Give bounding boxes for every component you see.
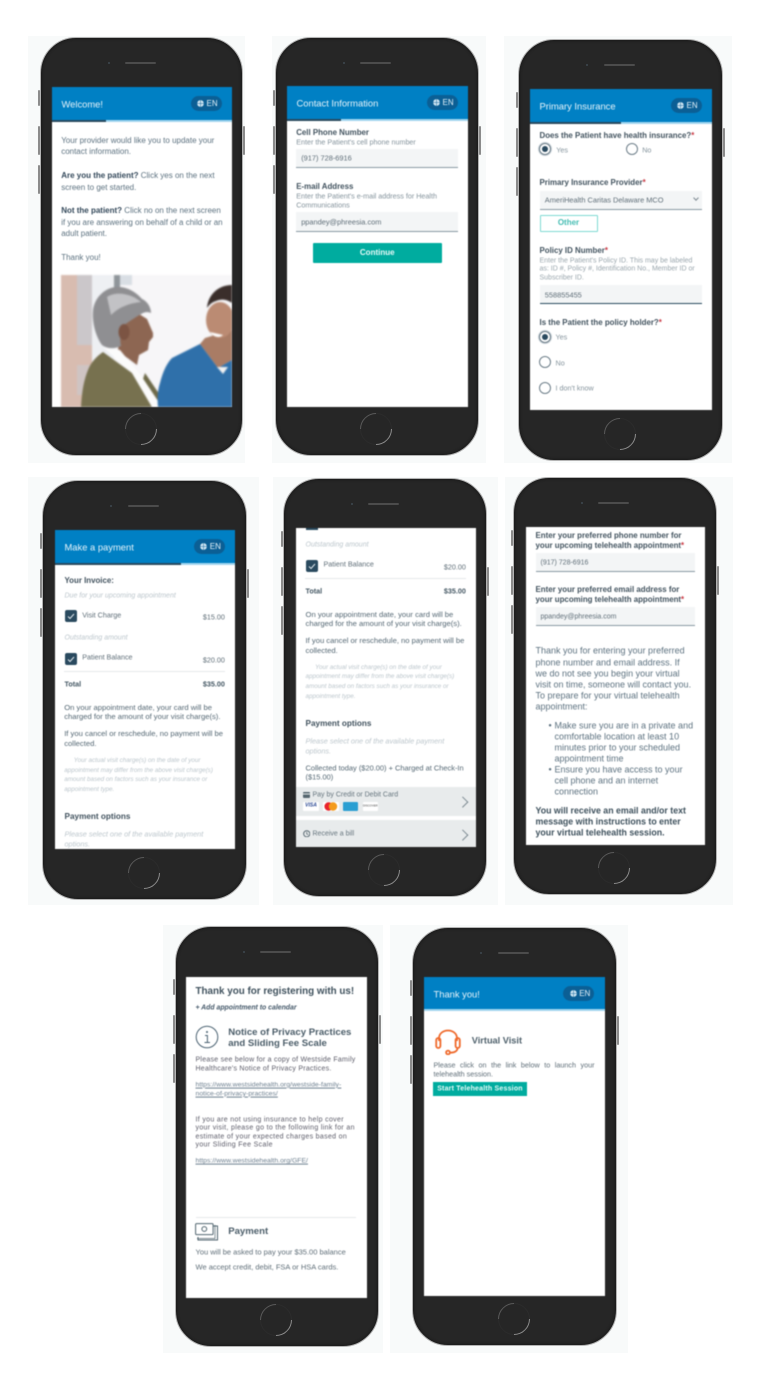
label: preferred email — [535, 585, 684, 604]
phone: virtual visit — [412, 927, 617, 1346]
help text: policy id: as: ID #, Policy #, Identification No., Member ID or — [540, 266, 695, 273]
heading: your invoice: Your Invoice: — [64, 576, 114, 585]
help text: policy id — [539, 256, 695, 281]
text: charge notice: On your appointment date, your card will be — [306, 610, 453, 619]
text: welcome message: Thank you! — [61, 253, 101, 262]
text: sliding fee: If you are not using insurance to help cover — [196, 1116, 344, 1123]
row: receive a bill — [296, 820, 476, 847]
text: disclaimer: appointment type. — [306, 692, 356, 699]
subheading: due: Due for your upcoming appointment — [64, 592, 176, 599]
heading: Primary Insurance: Primary Insurance — [540, 100, 616, 111]
text: select option: options. — [306, 747, 331, 756]
text: thank you paragraph — [535, 646, 691, 712]
text: thank you paragraph: appointment: — [536, 701, 588, 711]
text: email notice: message with instructions to enter — [536, 816, 681, 826]
screen: primary insurance — [530, 88, 712, 410]
language pill — [426, 95, 458, 110]
language pill: EN — [686, 101, 698, 110]
text: email notice: your virtual telehealth session. — [536, 828, 665, 838]
text: welcome message: Are you the patient? Click yes on the next — [61, 170, 215, 180]
text: privacy copy: Please see below for a copy of Westside Family — [196, 1057, 356, 1064]
phone: make a payment — [42, 480, 247, 900]
item: patient balance: Patient Balance — [82, 653, 133, 662]
phone: telehealth contact — [513, 477, 717, 895]
button: other — [540, 215, 598, 232]
checkbox: patient balance — [65, 652, 77, 665]
card: visa: VISA — [305, 802, 317, 808]
help text: cell phone: Enter the Patient's cell phone number — [296, 137, 416, 146]
language pill: EN — [442, 98, 454, 107]
list: preparation bullets: comfortable location at least 10 — [554, 731, 679, 741]
card: amex — [343, 802, 358, 810]
select: provider — [540, 191, 702, 210]
screen: make a payment — [54, 530, 234, 848]
row: pay by card — [296, 786, 476, 816]
input: email: ppandey@phreesia.com — [301, 217, 381, 226]
screen: virtual visit — [424, 976, 604, 1296]
link: privacy url: notice-of-privacy-practices/ — [196, 1090, 278, 1097]
phone: registration confirmation — [175, 926, 379, 1347]
card: visa — [303, 802, 319, 810]
arrow: receive a bill — [457, 830, 468, 840]
text: select option — [305, 737, 445, 756]
heading: payment options: Payment options — [64, 812, 130, 821]
phone: welcome screen — [40, 37, 243, 456]
text: charge notice: collected. — [64, 739, 96, 748]
link: add to calendar: + Add appointment to calendar — [196, 1005, 297, 1012]
list: preparation bullets: connection — [554, 786, 598, 796]
text: select option: options. — [64, 840, 90, 848]
text: sliding fee — [195, 1116, 355, 1149]
button: start telehealth session — [433, 1082, 527, 1096]
icon: clock — [302, 830, 311, 838]
header: Welcome — [52, 86, 232, 122]
button: continue — [312, 243, 442, 263]
text: welcome message: contact information. — [61, 147, 131, 156]
screen: payment options — [296, 528, 476, 846]
text: disclaimer: Your actual visit charge(s) on the date of your — [315, 664, 442, 671]
input: email — [296, 212, 458, 232]
text: charge notice: collected. — [306, 646, 338, 655]
amount: patient balance: $20.00 — [444, 562, 466, 571]
button: continue: Continue — [360, 248, 395, 257]
text: disclaimer: appointment may differ from the above visit charge(s) — [64, 766, 213, 773]
radio: I don't know — [539, 382, 551, 394]
text: charge notice — [305, 610, 465, 655]
subheading: outstanding: Outstanding amount — [64, 635, 128, 642]
language pill — [194, 539, 225, 554]
text: welcome message: Your provider would like you to update your — [61, 136, 214, 145]
text: charge notice: charged for the amount of your visit charge(s). — [306, 619, 462, 628]
screen: welcome — [52, 86, 232, 406]
list: preparation bullets: Make sure you are in a private and — [554, 720, 693, 730]
label: policy id: Policy ID Number* — [540, 246, 608, 255]
text: launch instructions: Please click on the link below to launch your — [434, 1061, 594, 1070]
text: charge notice: If you cancel or reschedule, no payment will be — [64, 729, 223, 738]
text: disclaimer — [305, 664, 454, 700]
input: policy id — [540, 285, 702, 304]
language pill: EN — [206, 99, 218, 108]
input: phone — [296, 148, 458, 168]
list: preparation bullets: cell phone and an internet — [554, 776, 658, 786]
question: health insurance: Does the Patient have health insurance?* — [540, 131, 694, 140]
text: collected today: Collected today ($20.00) + Charged at Check-In — [306, 763, 464, 772]
input: phone: (917) 728-6916 — [540, 559, 588, 566]
text: charge notice: charged for the amount of your visit charge(s). — [64, 712, 220, 721]
amount: visit charge: $15.00 — [203, 612, 225, 621]
label: preferred phone: your upcoming telehealth appointment* — [536, 541, 684, 550]
text: disclaimer: appointment type. — [64, 785, 114, 792]
subheading: outstanding: Outstanding amount — [306, 542, 369, 549]
input: policy id: 558855455 — [545, 290, 582, 299]
text: welcome message: screen to get started. — [61, 182, 136, 192]
text: thank you paragraph: we do not see you begin your virtual — [536, 668, 680, 678]
help text: email: Enter the Patient's e-mail address for Health — [296, 192, 437, 201]
item: patient balance: Patient Balance — [324, 560, 374, 569]
option label: no: No — [642, 145, 651, 154]
text: disclaimer: amount based on factors such as your insurance or — [306, 683, 449, 690]
button: other: Other — [558, 218, 579, 227]
text: charge notice: On your appointment date, your card will be — [64, 703, 212, 712]
radio: no — [626, 143, 638, 155]
text: email notice — [535, 805, 686, 838]
checkbox: patient balance — [306, 560, 318, 572]
option label: yes: Yes — [556, 332, 567, 341]
help text: email — [296, 192, 438, 209]
heading: Make a payment: Make a payment — [64, 541, 134, 552]
question: policy holder: Is the Patient the policy holder?* — [540, 318, 662, 327]
heading: notice of privacy: Notice of Privacy Practices — [228, 1027, 351, 1038]
text: disclaimer: amount based on factors such as your insurance or — [64, 776, 207, 783]
text: welcome message: if you are answering on behalf of a child or an — [61, 218, 223, 226]
screen: registration confirmation — [186, 976, 366, 1298]
button: start telehealth session: Start Telehealth Session — [437, 1086, 523, 1093]
language pill: EN — [210, 542, 221, 551]
screen: contact information — [286, 86, 468, 406]
photo: patient with nurse — [60, 274, 233, 408]
text: welcome message — [60, 136, 223, 262]
text: charge notice: If you cancel or reschedule, no payment will be — [306, 636, 464, 645]
checkbox: visit charge — [65, 610, 77, 622]
help text: policy id: Subscriber ID. — [540, 274, 584, 281]
text: disclaimer — [64, 757, 213, 793]
list: preparation bullets — [548, 720, 694, 796]
text: privacy copy — [195, 1056, 356, 1073]
heading: notice of privacy — [228, 1027, 352, 1049]
input: email: ppandey@phreesia.com — [540, 613, 616, 620]
language pill — [190, 96, 222, 110]
label: insurance provider: Primary Insurance Provider* — [540, 178, 646, 187]
label: email address: E-mail Address — [296, 182, 353, 191]
label: preferred phone: Enter your preferred phone number for — [536, 531, 682, 540]
header: Primary Insurance — [530, 88, 712, 124]
language pill — [563, 986, 594, 1000]
link: privacy url: https://www.westsidehealth.org/westside-family- — [196, 1081, 341, 1088]
select: provider: AmeriHealth Caritas Delaware MCO — [545, 196, 664, 205]
heading: payment: Payment — [228, 1226, 268, 1237]
text: select option: Please select one of the available payment — [64, 830, 203, 839]
input: email — [536, 607, 695, 626]
list: preparation bullets: appointment time — [554, 753, 624, 763]
card: discover — [362, 802, 378, 810]
text: disclaimer: appointment may differ from the above visit charge(s) — [306, 673, 454, 680]
list: preparation bullets: Ensure you have access to your — [554, 764, 683, 774]
help text: policy id: Enter the Patient's Policy ID. This may be labeled — [540, 257, 692, 264]
text: collected today: ($15.00) — [306, 772, 333, 781]
icon: money — [194, 1222, 219, 1242]
text: thank you paragraph: To prepare for your virtual telehealth — [536, 690, 680, 700]
text: welcome message: Not the patient? Click no on the next screen — [61, 206, 221, 214]
list: preparation bullets: • — [548, 764, 552, 774]
label: receive a bill: Receive a bill — [312, 830, 354, 837]
header: Contact Information — [286, 86, 468, 120]
heading: notice of privacy: and Sliding Fee Scale — [228, 1038, 327, 1049]
text: sliding fee: your Sliding Fee Scale — [196, 1142, 273, 1149]
text: welcome message: adult patient. — [61, 229, 107, 238]
text: accepted cards: We accept credit, debit, FSA or HSA cards. — [196, 1262, 338, 1271]
phone: contact information — [275, 37, 479, 456]
label: preferred phone — [535, 531, 684, 550]
card: discover: DISCOVER — [363, 804, 378, 808]
language pill: EN — [579, 989, 590, 998]
label: total: Total — [64, 679, 81, 688]
help text: email: Communications — [296, 200, 350, 209]
label: preferred email: your upcoming telehealth appointment* — [536, 595, 684, 604]
radio: yes selected — [539, 143, 551, 155]
option label: no: No — [556, 358, 565, 367]
text: select option: Please select one of the available payment — [306, 737, 444, 746]
card: mastercard — [323, 802, 339, 810]
icon: info — [195, 1025, 219, 1049]
amount: total: $35.00 — [203, 679, 225, 688]
amount: total: $35.00 — [444, 586, 466, 595]
text: launch instructions — [433, 1061, 595, 1078]
text: disclaimer: Your actual visit charge(s) on the date of your — [74, 757, 200, 764]
text: collected today — [305, 763, 464, 782]
list: preparation bullets: minutes prior to your scheduled — [554, 742, 680, 752]
option label: I don't know: I don't know — [556, 384, 594, 393]
text: privacy copy: Healthcare's Notice of Privacy Practices. — [196, 1066, 332, 1073]
heading: virtual visit: Virtual Visit — [472, 1036, 522, 1046]
option label: yes: Yes — [556, 145, 568, 154]
heading: Welcome: Welcome! — [62, 98, 103, 109]
heading: payment options: Payment options — [306, 719, 371, 728]
text: thank you paragraph: phone number and email address. If — [536, 657, 680, 667]
text: charge notice — [64, 703, 224, 748]
text: email notice: You will receive an email and/or text — [536, 805, 686, 815]
list: preparation bullets: • — [548, 720, 552, 730]
heading: thank you: Thank you for registering with us! — [196, 986, 354, 997]
radio: no — [539, 356, 551, 368]
icon: headset — [434, 1028, 462, 1056]
link: privacy url — [195, 1081, 342, 1098]
arrow: pay by card — [457, 796, 468, 807]
text: thank you paragraph: Thank you for entering your preferred — [536, 646, 685, 656]
text: select option — [64, 830, 204, 848]
link: GFE url: https://www.westsidehealth.org/GFE/ — [196, 1158, 308, 1165]
input: phone — [536, 552, 695, 572]
icon: credit card — [302, 791, 311, 799]
amount: patient balance: $20.00 — [203, 655, 225, 664]
item: visit charge: Visit Charge — [82, 610, 121, 619]
label: pay by card: Pay by Credit or Debit Card — [312, 791, 398, 798]
label: cell phone number: Cell Phone Number — [296, 128, 369, 137]
phone: payment options — [283, 478, 487, 897]
header: Make a payment — [54, 530, 234, 564]
header: Thank you — [424, 976, 604, 1010]
text: launch instructions: telehealth session. — [434, 1069, 493, 1078]
phone: primary insurance — [518, 39, 723, 461]
text: thank you paragraph: visit on time, someone will contact you. — [536, 679, 691, 689]
text: sliding fee: estimate of your expected charges based on — [196, 1133, 347, 1140]
label: total: Total — [306, 586, 322, 595]
heading: Thank you: Thank you! — [434, 988, 480, 999]
label: preferred email: Enter your preferred email address for — [536, 585, 679, 594]
language pill — [670, 98, 702, 112]
text: balance: You will be asked to pay your $35.00 balance — [196, 1247, 346, 1256]
screen: telehealth contact — [526, 526, 704, 844]
heading: Contact Information: Contact Information — [296, 97, 378, 108]
text: sliding fee: your visit, please go to the following link for an — [196, 1124, 355, 1131]
radio: yes selected — [539, 330, 551, 342]
input: phone: (917) 728-6916 — [301, 153, 352, 162]
